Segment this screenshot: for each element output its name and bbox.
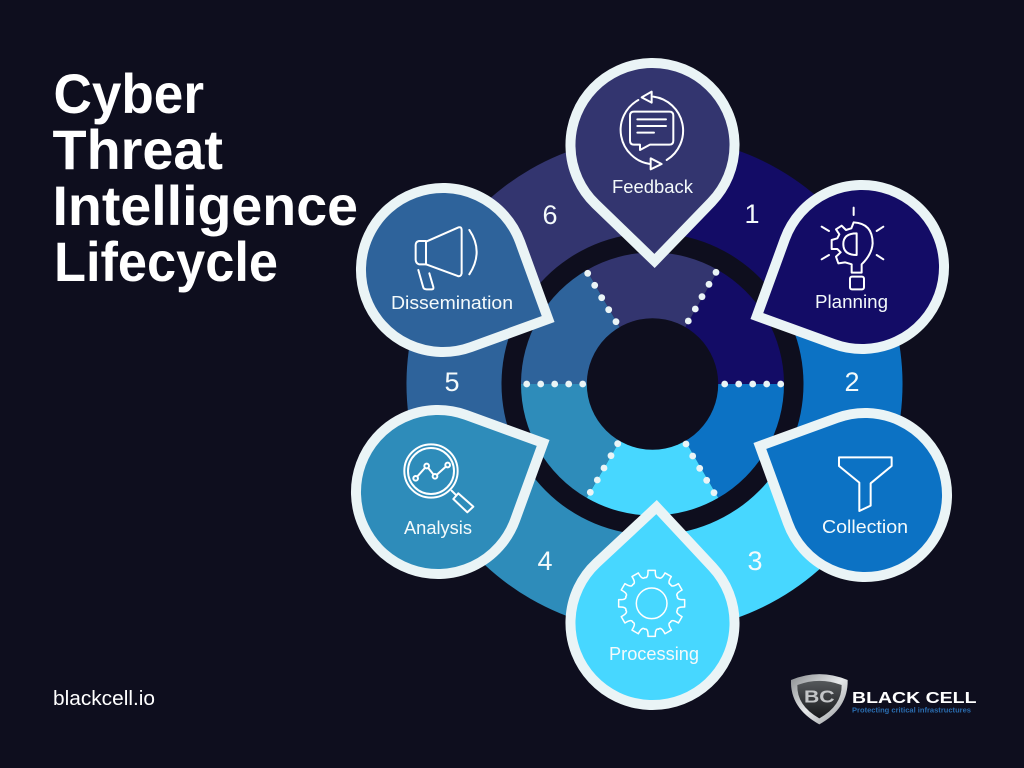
step numbers: 1: [744, 199, 760, 229]
icon: collection funnel: [839, 457, 892, 511]
pin: processing: [568, 504, 739, 708]
logo: Black Cell: [791, 674, 976, 724]
pin: analysis: Analysis: [404, 518, 472, 538]
logo: Black Cell: Protecting critical infrastructures: [852, 708, 971, 714]
icon: analysis magnifier: [404, 444, 473, 512]
logo: Black Cell: BLACK CELL: [852, 690, 976, 707]
step numbers: 4: [537, 546, 553, 576]
outer ring: [406, 136, 903, 632]
pin: planning: [722, 158, 971, 390]
pin: analysis: [329, 369, 578, 601]
pin: feedback: [569, 62, 737, 262]
title: Lifecycle: [54, 230, 278, 293]
icon: shield: BC: [804, 686, 835, 706]
dotted dividers: [523, 269, 784, 496]
pin: collection: [725, 372, 974, 604]
step numbers: 5: [444, 367, 460, 397]
pin: dissemination: [334, 161, 583, 393]
step numbers: 2: [844, 367, 860, 397]
title: Threat: [52, 118, 223, 181]
icon: planning light bulb with gear: [822, 208, 883, 289]
step numbers: 3: [747, 546, 763, 576]
icon: dissemination megaphone: [416, 227, 477, 289]
step numbers: [444, 199, 860, 576]
title: Cyber: [54, 62, 204, 125]
icon: shield: [791, 674, 848, 724]
icon: feedback speech bubble: [621, 92, 683, 169]
inner donut: [521, 252, 784, 516]
pin: processing: Processing: [609, 644, 699, 664]
title: Intelligence: [52, 174, 358, 237]
pin: feedback: Feedback: [612, 177, 694, 197]
website url: blackcell.io: [53, 688, 155, 710]
pin: planning: Planning: [815, 292, 888, 312]
title: [52, 62, 358, 293]
pin: dissemination: Dissemination: [391, 293, 513, 313]
icon: processing gear: [619, 570, 685, 636]
step numbers: 6: [542, 200, 558, 230]
pin: collection: Collection: [822, 517, 908, 537]
